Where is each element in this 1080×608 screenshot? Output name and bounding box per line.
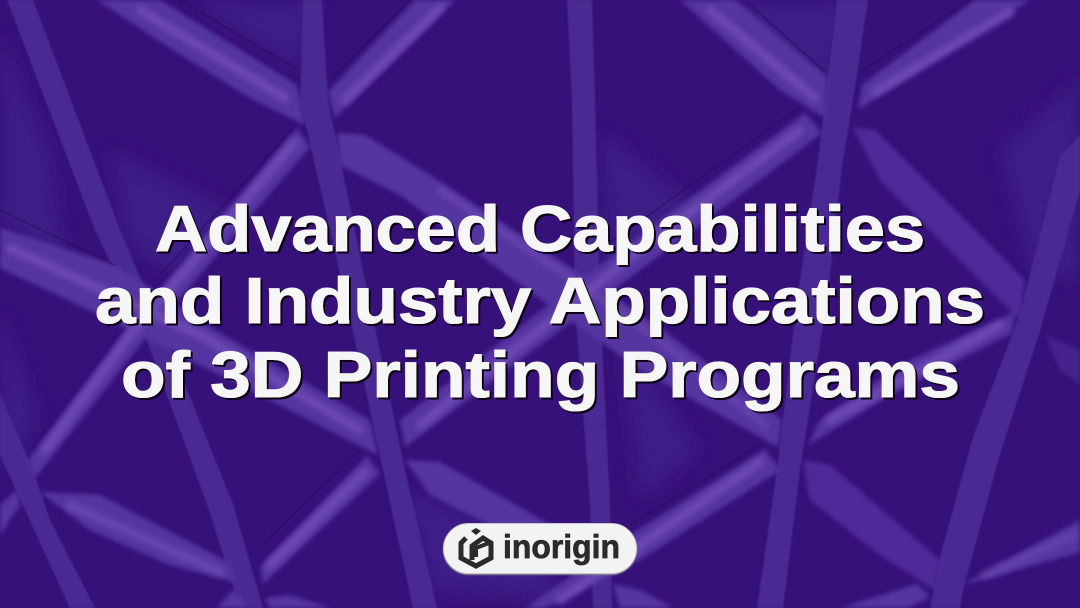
title: [95, 192, 985, 411]
logo pill background: [444, 524, 636, 574]
logo wordmark: inorigin: [503, 528, 620, 565]
title line 1: Advanced Capabilities: [155, 192, 925, 265]
logo badge: [444, 524, 636, 574]
title line 3: of 3D Printing Programs: [121, 338, 960, 411]
title line 2: and Industry Applications: [95, 264, 985, 337]
icon: hexagonal cube: [461, 528, 491, 566]
